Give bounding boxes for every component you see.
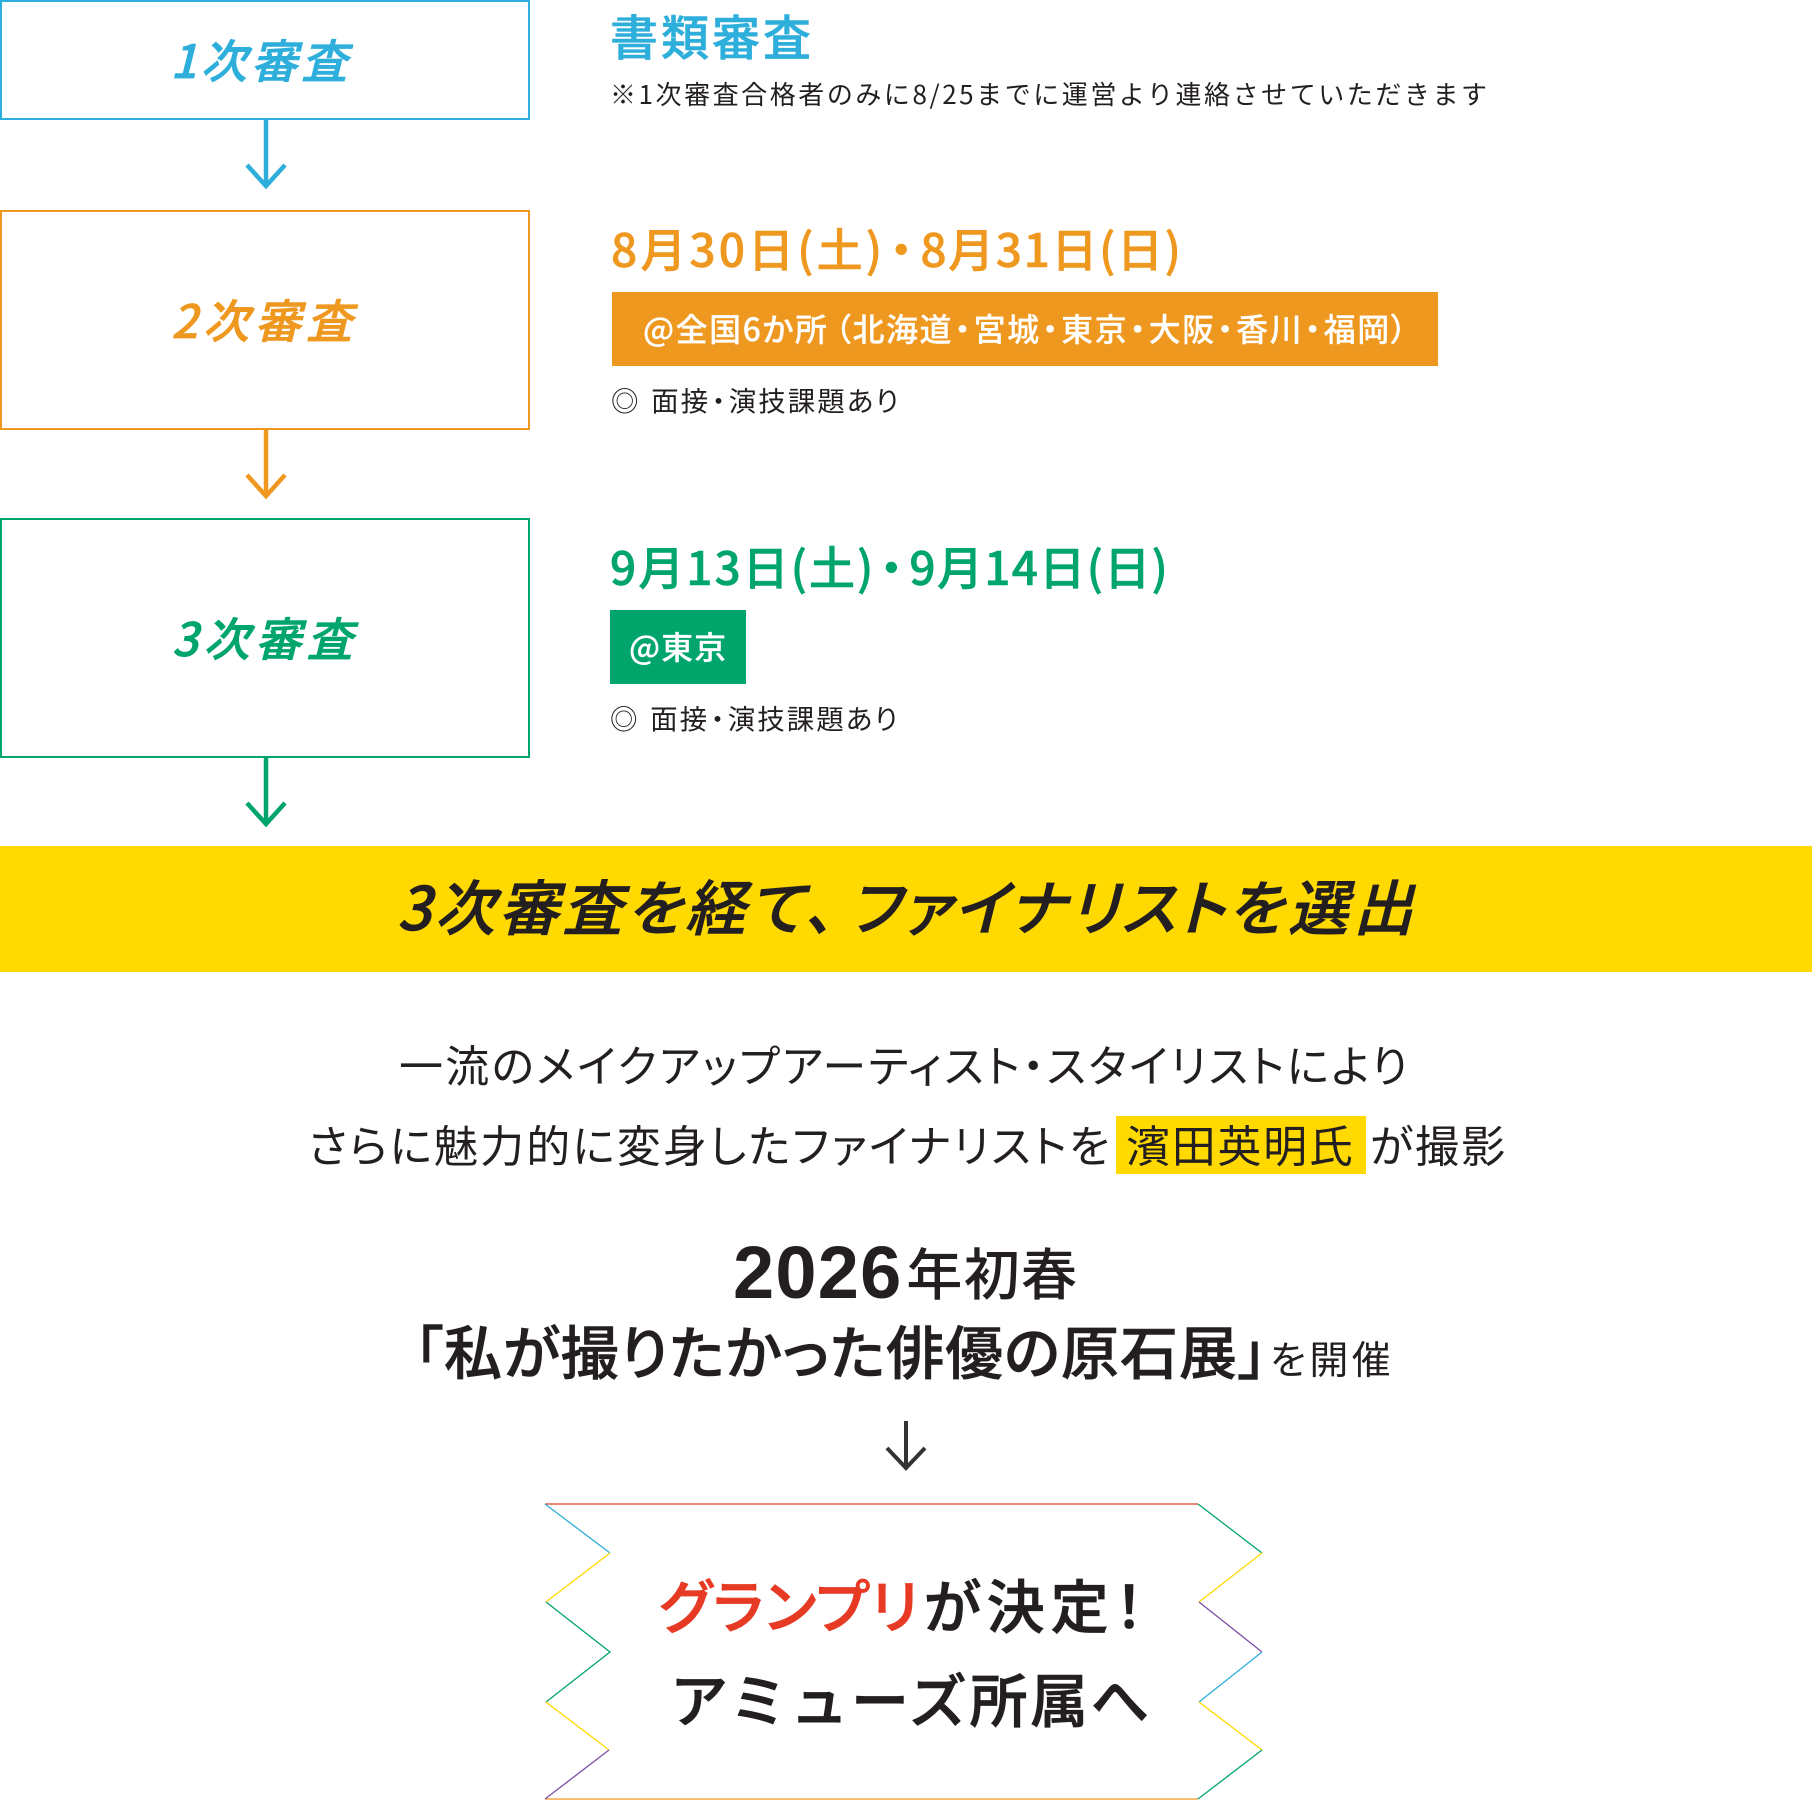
step 3 note: ◎ 面接・演技課題あり — [610, 697, 899, 737]
step 3 box: 3次審査 — [172, 604, 358, 670]
step 2 note: ◎ 面接・演技課題あり — [611, 379, 900, 419]
paragraph line 1: 一流のメイクアップアーティスト・スタイリストにより — [399, 1031, 1410, 1095]
step 3 box — [0, 518, 530, 758]
step 2 box: 2次審査 — [171, 286, 358, 352]
ribbon text line 1: グランプリが決定！ — [659, 1561, 1150, 1645]
step 3 venue bar: @東京 — [629, 623, 727, 669]
step 3 dates: 9月13日(土)・9月14日(日) — [610, 533, 1169, 599]
step 3 venue bar — [610, 610, 746, 684]
step 2 box — [0, 210, 530, 430]
step 1 note: ※1次審査合格者のみに8/25までに運営より連絡させていただきます — [610, 75, 1490, 112]
step 1 box: 1次審査 — [170, 26, 352, 92]
exhibition title: 「私が撮りたかった俳優の原石展」を開催 — [414, 1307, 1394, 1391]
text before name: さらに魅力的に変身したファイナリストを — [308, 1111, 1112, 1175]
paragraph line 2 — [308, 1111, 1507, 1175]
yellow finalist band — [0, 846, 1812, 972]
year heading: 2026年初春 — [733, 1231, 1078, 1314]
step 2 venue bar — [612, 292, 1438, 366]
yellow finalist band: 3次審査を経て、ファイナリストを選出 — [397, 861, 1418, 948]
ribbon text line 2: アミューズ所属へ — [670, 1655, 1152, 1739]
step 2 venue bar: @全国6か所 （北海道・宮城・東京・大阪・香川・福岡） — [643, 305, 1408, 351]
step 1 box — [0, 0, 530, 120]
step 2 dates: 8月30日(土)・8月31日(日) — [611, 215, 1183, 281]
text after name: が撮影 — [1370, 1111, 1507, 1175]
step 1 heading: 書類審査 — [610, 0, 814, 69]
highlight: photographer name: 濱田英明氏 — [1126, 1111, 1354, 1175]
